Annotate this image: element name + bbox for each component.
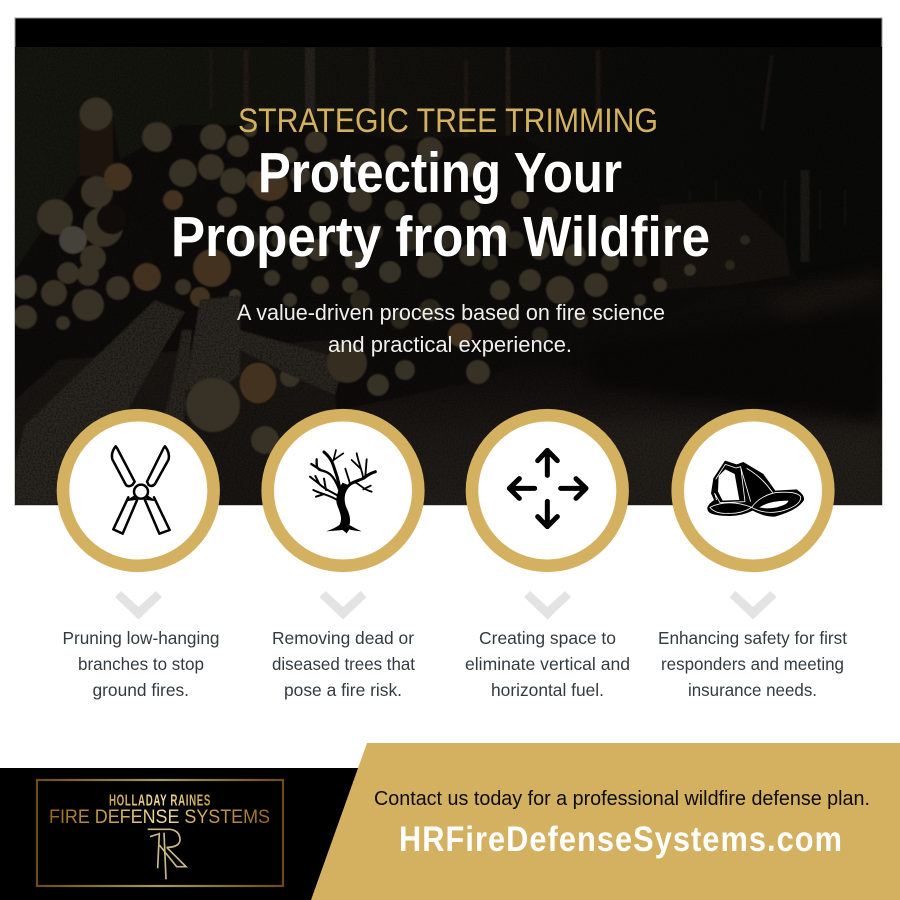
caption 4: responders and meeting (661, 654, 844, 674)
panel: hero photo background (13, 18, 882, 505)
chevron 2 (320, 591, 366, 620)
subtitle: and practical experience. (328, 332, 572, 357)
chevron 1 (115, 591, 162, 620)
footer: black logo panel (0, 768, 362, 900)
film grain (15, 47, 882, 505)
step 4: safety (658, 415, 847, 700)
bark grain (15, 290, 355, 505)
icon ring 4 (678, 415, 828, 566)
caption 2: diseased trees that (272, 654, 415, 674)
step 3: creating space (465, 415, 630, 700)
contact line: Contact us today for a professional wildfire defense plan. (374, 788, 870, 810)
subtitle: A value-driven process based on fire science (237, 300, 665, 325)
caption 1: ground fires. (92, 680, 189, 700)
caption 2: pose a fire risk. (284, 680, 402, 700)
title line 2: Property from Wildfire (171, 205, 710, 269)
icon ring 2 (268, 415, 418, 566)
chevron 4 (730, 591, 776, 620)
icon: loppers (112, 446, 170, 534)
title line 1: Protecting Your (258, 141, 622, 205)
caption 3: horizontal fuel. (491, 680, 604, 700)
footer: gold contact panel (311, 743, 900, 900)
icon ring 3 (472, 415, 623, 566)
upright log (79, 114, 113, 176)
caption 1: Pruning low-hanging (62, 628, 220, 648)
caption 4: insurance needs. (688, 680, 817, 700)
caption 3: Creating space to (479, 628, 616, 648)
step 1: pruning (62, 415, 220, 700)
crescent log (83, 207, 123, 247)
log ends (15, 97, 696, 454)
caption 2 (272, 628, 415, 700)
kicker: strategic tree trimming: STRATEGIC TREE TRIMMING (238, 102, 658, 140)
logo: Holladay Raines Fire Defense Systems (37, 780, 283, 886)
ground shadow bands (610, 375, 880, 418)
caption 1 (62, 628, 220, 700)
subtitle (237, 300, 665, 357)
icon ring 1 (63, 415, 214, 566)
caption 4: Enhancing safety for first (658, 628, 847, 648)
website URL: HRFireDefenseSystems.com (399, 820, 843, 859)
wood pile silhouette (16, 126, 511, 409)
heading group (171, 102, 710, 357)
step 2: removing (268, 415, 418, 700)
logo: Holladay Raines Fire Defense Systems: FIRE DEFENSE SYSTEMS (49, 806, 270, 828)
icon: four-way arrows (509, 450, 586, 527)
icon: dead tree (310, 450, 375, 533)
chevron 3 (524, 591, 571, 620)
caption 2: Removing dead or (272, 628, 414, 648)
caption 1: branches to stop (78, 654, 204, 674)
logo: Holladay Raines Fire Defense Systems: HOLLADAY RAINES (109, 792, 211, 810)
caption 3: eliminate vertical and (465, 654, 630, 674)
caption 3 (465, 628, 630, 700)
icon: firefighter helmet (707, 461, 804, 517)
caption 4 (658, 628, 847, 700)
big fallen logs (15, 300, 185, 505)
